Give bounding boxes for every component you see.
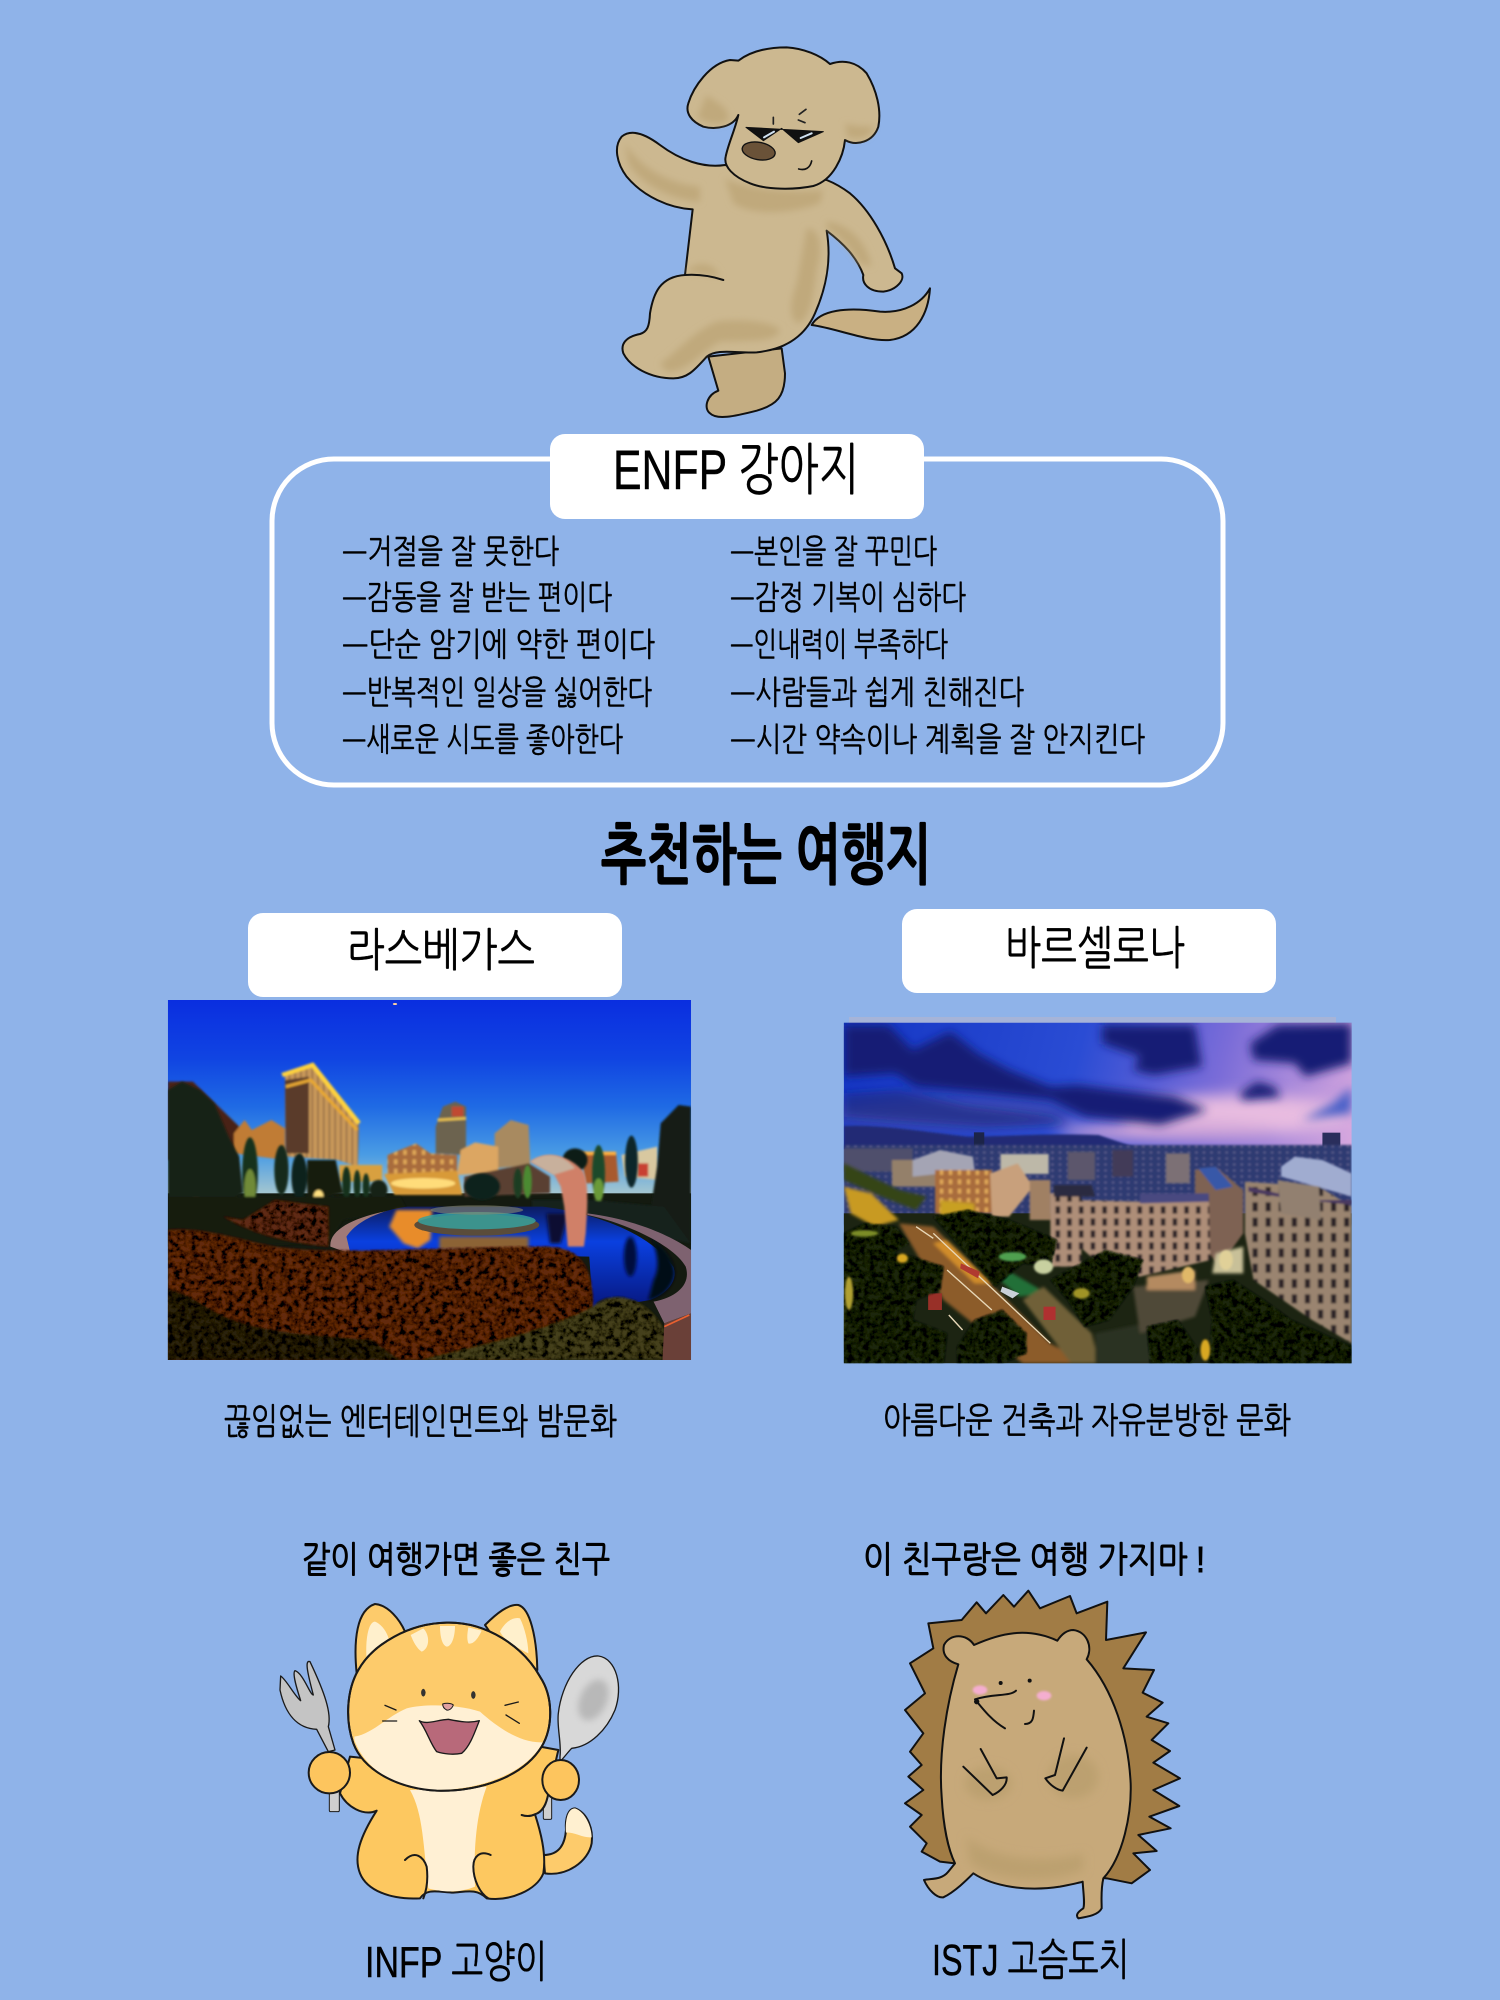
trait list: right column: ㅡ감정 기복이 심하다 (730, 579, 966, 616)
illustration: ISTJ hedgehog (905, 1591, 1180, 1918)
trait list: left column: ㅡ새로운 시도를 좋아한다 (342, 721, 623, 758)
trait list: left column: ㅡ감동을 잘 받는 편이다 (342, 579, 612, 616)
trait list: right column: ㅡ시간 약속이나 계획을 잘 안지킨다 (730, 721, 1145, 758)
trait list: right column: ㅡ본인을 잘 꾸민다 (730, 533, 937, 570)
panel outline (272, 459, 1223, 785)
photo: Barcelona (827, 1017, 1352, 1363)
trait list: right column: ㅡ사람들과 쉽게 친해진다 (730, 674, 1024, 711)
illustration: ENFP dog with sunglasses (617, 47, 930, 417)
label: Barcelona: 바르셀로나 (1005, 922, 1185, 974)
heading: recommended destinations: 추천하는 여행지 (601, 818, 931, 892)
caption: Barcelona: 아름다운 건축과 자유분방한 문화 (883, 1400, 1291, 1441)
name: ISTJ hedgehog: ISTJ 고슴도치 (932, 1936, 1129, 1985)
label: Las Vegas (248, 913, 622, 997)
title box: ENFP 강아지 (613, 438, 859, 501)
panel: ENFP traits (272, 434, 1223, 785)
label: Barcelona (902, 909, 1276, 993)
illustration: INFP cat with fork and spoon (280, 1604, 619, 1899)
photo: Las Vegas (168, 1000, 691, 1360)
trait list: left column: ㅡ반복적인 일상을 싫어한다 (342, 674, 652, 711)
caption: Las Vegas: 끊임없는 엔터테인먼트와 밤문화 (224, 1401, 617, 1442)
name: INFP cat: INFP 고양이 (365, 1938, 547, 1987)
heading: good travel companion: 같이 여행가면 좋은 친구 (302, 1539, 610, 1580)
trait list: left column (342, 533, 655, 758)
trait list: left column: ㅡ단순 암기에 약한 편이다 (342, 626, 655, 663)
trait list: right column (730, 533, 1145, 758)
trait list: left column: ㅡ거절을 잘 못한다 (342, 533, 559, 570)
heading: avoid travelling with: 이 친구랑은 여행 가지마 ! (863, 1539, 1205, 1580)
trait list: right column: ㅡ인내력이 부족하다 (730, 626, 948, 663)
title box (550, 434, 924, 519)
label: Las Vegas: 라스베가스 (347, 924, 535, 976)
